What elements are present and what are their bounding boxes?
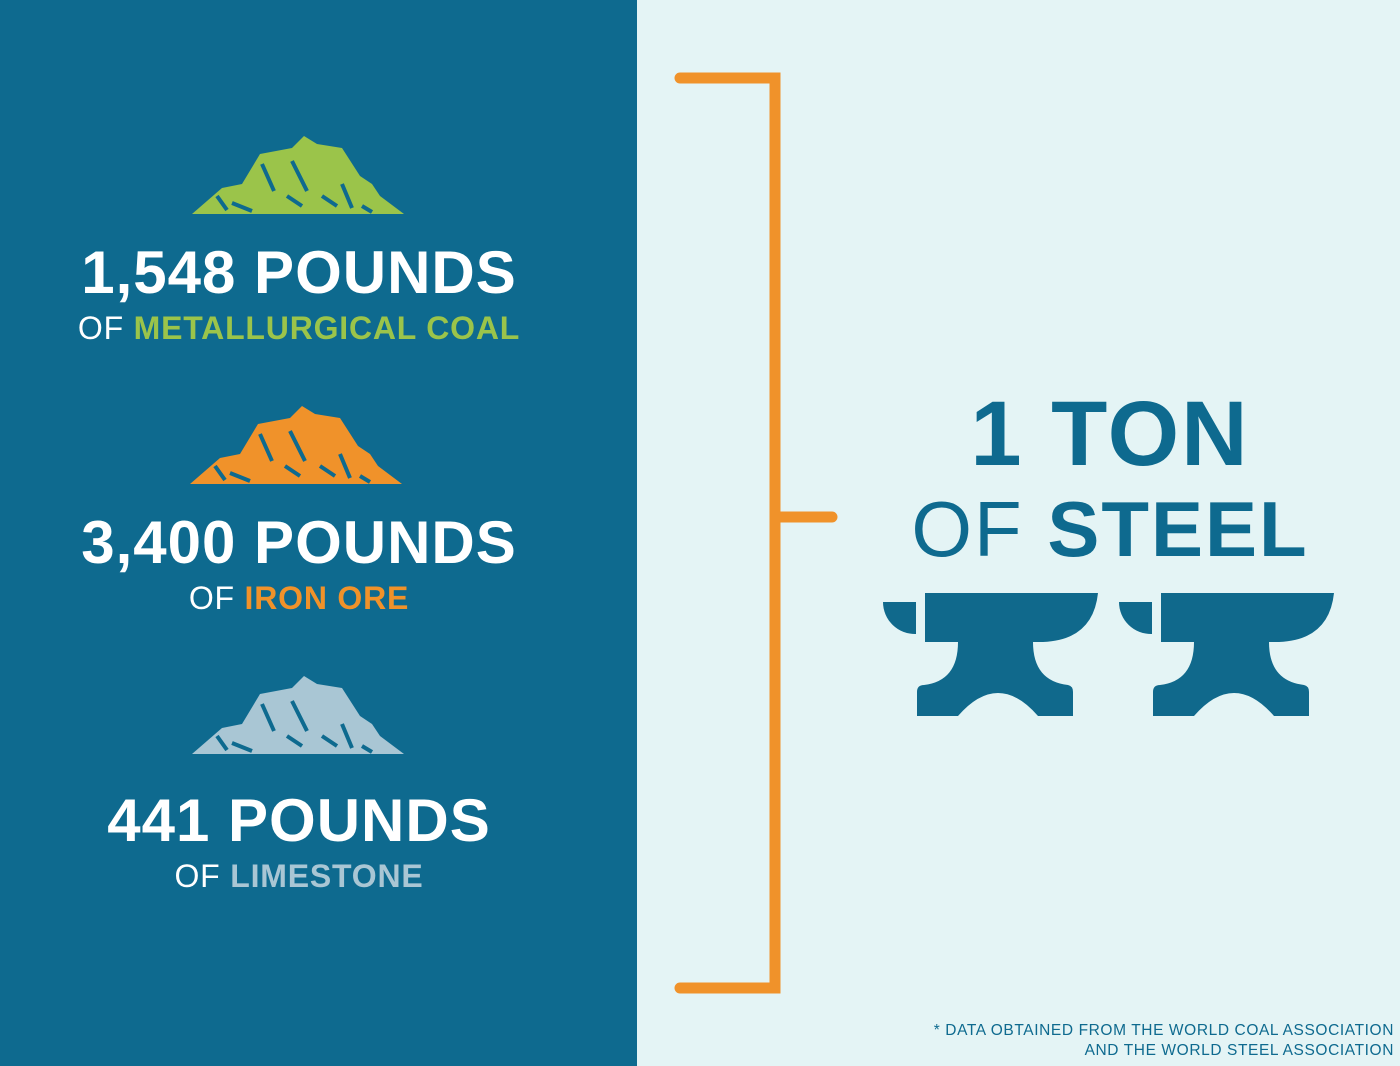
icon: anvils [883, 593, 1334, 716]
footnote: AND THE WORLD STEEL ASSOCIATION [1085, 1042, 1394, 1059]
text: limestone label: OF LIMESTONE [174, 858, 424, 894]
panel: left ingredients [0, 0, 637, 1066]
icon: limestone pile [192, 676, 404, 754]
heading: limestone amount: 441 POUNDS [107, 787, 491, 854]
icon: coal pile [192, 136, 404, 214]
bracket arrow [674, 72, 838, 994]
heading: iron ore amount: 3,400 POUNDS [81, 509, 517, 576]
text: iron ore label: OF IRON ORE [189, 580, 409, 616]
heading: 1 ton: 1 TON [970, 383, 1250, 485]
text: coal label: OF METALLURGICAL COAL [78, 310, 520, 346]
footnote: * DATA OBTAINED FROM THE WORLD COAL ASSOCIATION [934, 1022, 1394, 1039]
heading: coal amount: 1,548 POUNDS [81, 239, 517, 306]
icon: iron ore pile [190, 406, 402, 484]
footnote [934, 1022, 1394, 1059]
heading: of steel: OF STEEL [911, 485, 1309, 573]
